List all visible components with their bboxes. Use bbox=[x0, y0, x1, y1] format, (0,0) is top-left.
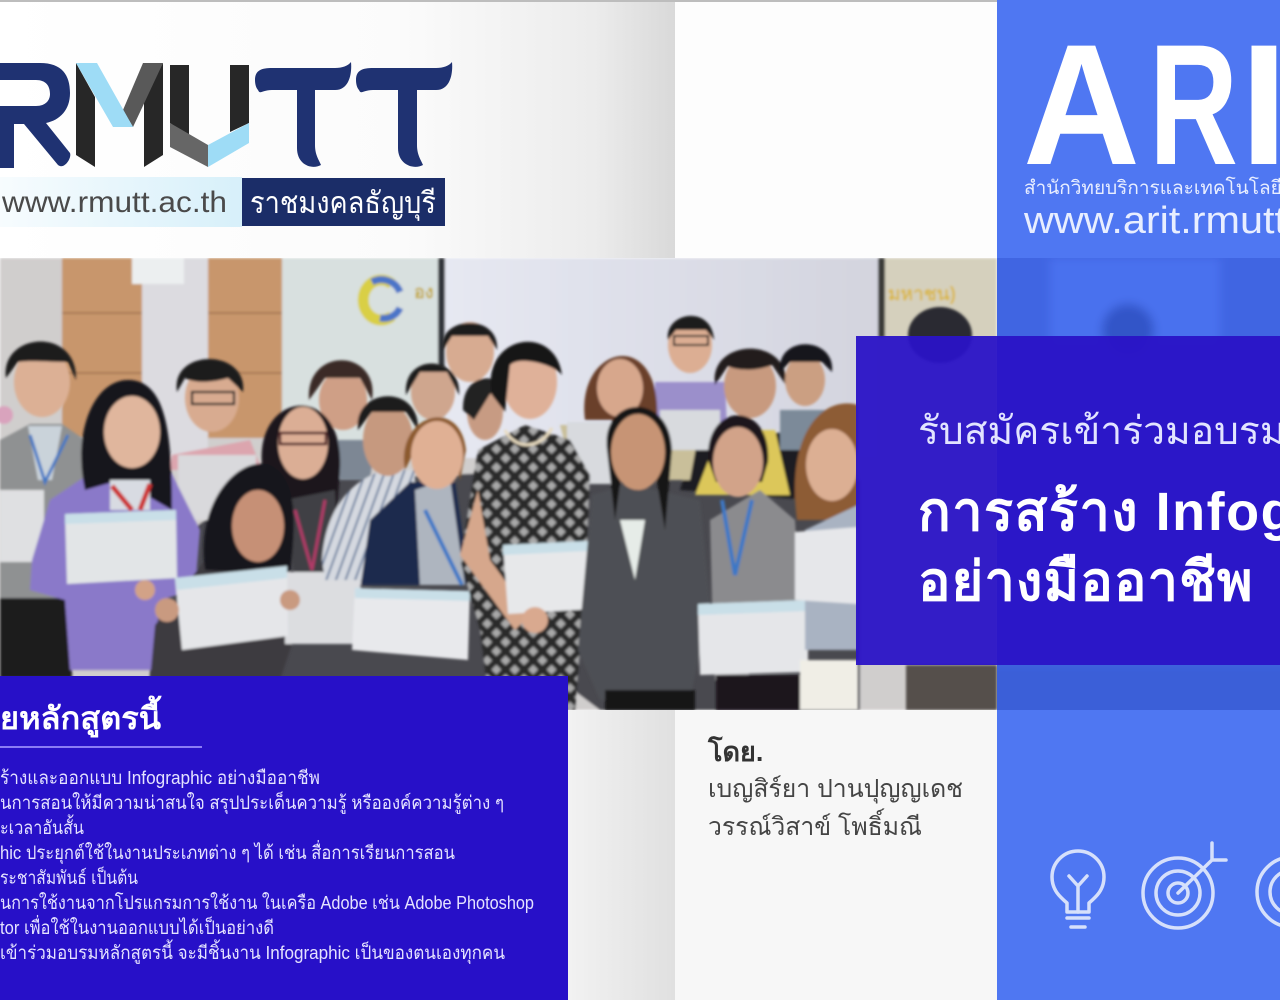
heading underline bbox=[0, 746, 202, 748]
presenters credit bbox=[707, 735, 963, 841]
icon: target with arrow bbox=[1143, 843, 1226, 928]
man at far left bbox=[0, 341, 85, 678]
university name tag bbox=[242, 178, 445, 226]
ARIT letter A: A bbox=[1023, 9, 1140, 201]
presenter two: วรรณ์วิสาข์ โพธิ์มณี bbox=[708, 808, 922, 841]
person behind the title panel bbox=[906, 307, 997, 710]
icon: partial circle at edge bbox=[1257, 857, 1280, 927]
benefits list: ระชาสัมพันธ์ เป็นต้น bbox=[0, 865, 138, 888]
woman in stripes bbox=[322, 396, 418, 580]
man with glasses and certificate bbox=[170, 359, 262, 520]
young woman in navy jacket bbox=[352, 417, 470, 660]
woman in grey polo with certificate bbox=[698, 415, 808, 710]
panel: right blue column bbox=[997, 0, 1280, 1000]
panel: course benefits bbox=[0, 676, 568, 1000]
university name tag: ราชมงคลธัญบุรี bbox=[250, 187, 436, 222]
woman with glasses bbox=[260, 404, 342, 574]
photo: people bbox=[0, 307, 997, 710]
benefits list: ะเวลาอันสั้น bbox=[0, 814, 84, 838]
benefits list bbox=[0, 767, 534, 965]
central woman in patterned dress bbox=[458, 340, 592, 710]
credit label: โดย. bbox=[707, 735, 763, 767]
benefits heading: ยหลักสูตรนี้ bbox=[0, 695, 162, 738]
benefits list: hic ประยุกต์ใช้ในงานประเภทต่าง ๆ ได้ เช่น สื่อการเรียนการสอน bbox=[0, 840, 455, 865]
benefits list: ร้างและออกแบบ Infographic อย่างมืออาชีพ bbox=[0, 767, 320, 788]
back row bbox=[309, 316, 832, 500]
benefits list: เข้าร่วมอบรมหลักสูตรนี้ จะมีชิ้นงาน Infographic เป็นของตนเองทุกคน bbox=[0, 939, 505, 965]
ARIT full name: สำนักวิทยบริการและเทคโนโลยี bbox=[1024, 176, 1280, 199]
ghost photo on blue column bbox=[997, 258, 1280, 710]
ARIT letter R: R bbox=[1149, 9, 1238, 201]
benefits list: นการใช้งานจากโปรแกรมการใช้งาน ในเครือ Adobe เช่น Adobe Photoshop bbox=[0, 892, 534, 913]
logo letter T second bbox=[356, 62, 452, 167]
photo: wall logo bbox=[363, 280, 392, 320]
photo room background bbox=[0, 258, 997, 710]
woman in grey blazer bbox=[578, 407, 710, 710]
group photo bbox=[0, 258, 997, 710]
woman with brown hair at panel edge bbox=[795, 403, 858, 710]
course title line 2: อย่างมืออาชีพ bbox=[918, 552, 1254, 612]
panel: course title bbox=[856, 336, 1280, 665]
ARIT url: www.arit.rmutt bbox=[1023, 200, 1280, 242]
woman kneeling with certificate bbox=[150, 464, 361, 680]
logo letter T bbox=[255, 62, 351, 167]
benefits list: tor เพื่อใช้ในงานออกแบบได้เป็นอย่างดี bbox=[0, 915, 274, 938]
photo: dark crowd backing bbox=[150, 470, 860, 710]
icon: light bulb bbox=[1052, 851, 1104, 927]
benefits list: นการสอนให้มีความน่าสนใจ สรุปประเด็นความรู้ หรือองค์ความรู้ต่าง ๆ bbox=[0, 790, 504, 815]
logo letter U bbox=[170, 65, 249, 167]
course intro line: รับสมัครเข้าร่วมอบรม bbox=[918, 410, 1280, 453]
logo letter R bbox=[0, 63, 70, 168]
website url: www.rmutt.ac.th bbox=[1, 186, 227, 219]
website strip bbox=[0, 177, 242, 227]
photo room background: มหาชน) bbox=[888, 284, 956, 305]
logo letter M bbox=[76, 63, 163, 167]
presenter one: เบญสิร์ยา ปานปุญญเดช bbox=[708, 775, 963, 804]
ARIT logo bbox=[1023, 9, 1280, 242]
RMUTT logo bbox=[0, 62, 452, 227]
photo room background: อง bbox=[414, 282, 434, 302]
woman in purple with certificate bbox=[30, 380, 200, 670]
